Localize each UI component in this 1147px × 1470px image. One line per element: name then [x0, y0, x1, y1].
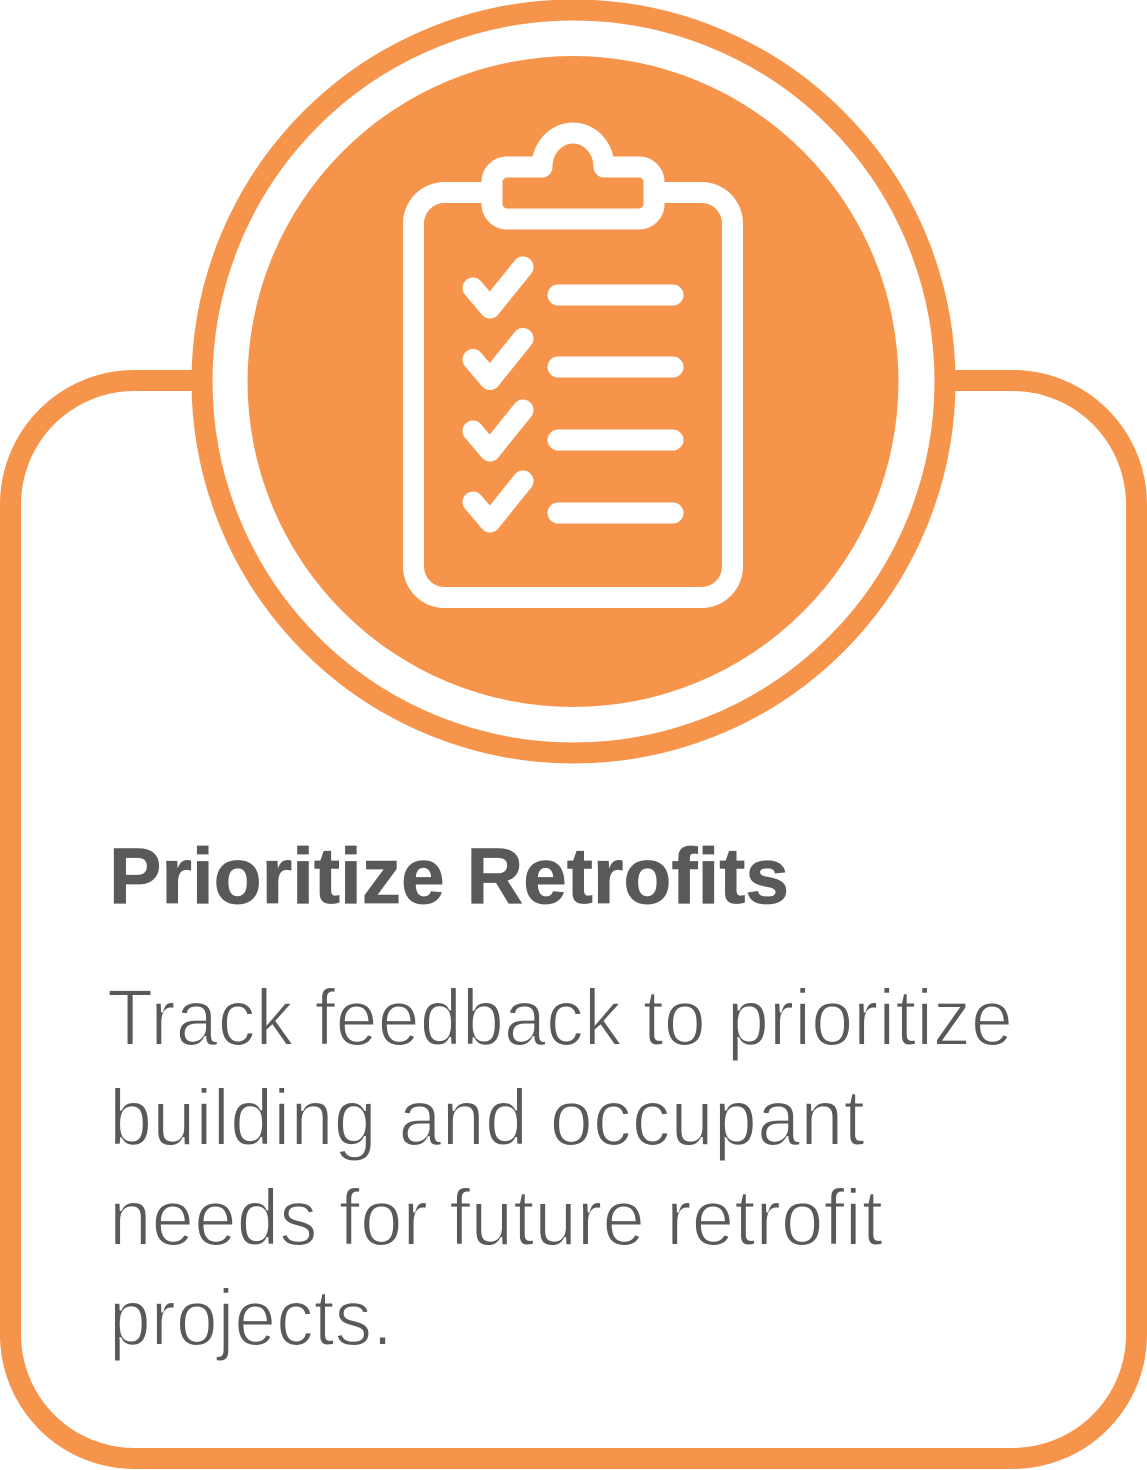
body text [107, 973, 1013, 1362]
body line 1: Track feedback to prioritize [107, 973, 1013, 1062]
body line 2: building and occupant [109, 1073, 865, 1162]
badge inner disc [248, 56, 898, 707]
icon: circular badge [202, 10, 945, 753]
clipboard clip [492, 133, 654, 219]
checklist row 2 [473, 338, 673, 380]
icon: clipboard [414, 133, 732, 598]
panel: rounded card outline [10, 380, 1136, 1458]
checklist row 3 [473, 410, 673, 451]
checklist row 4 [473, 481, 673, 522]
body line 4: projects. [109, 1273, 393, 1362]
body line 3: needs for future retrofit [109, 1173, 883, 1262]
heading: Prioritize Retrofits [109, 831, 789, 920]
clipboard board [414, 192, 732, 598]
badge outer ring [202, 10, 945, 753]
checklist row 1 [473, 267, 673, 308]
